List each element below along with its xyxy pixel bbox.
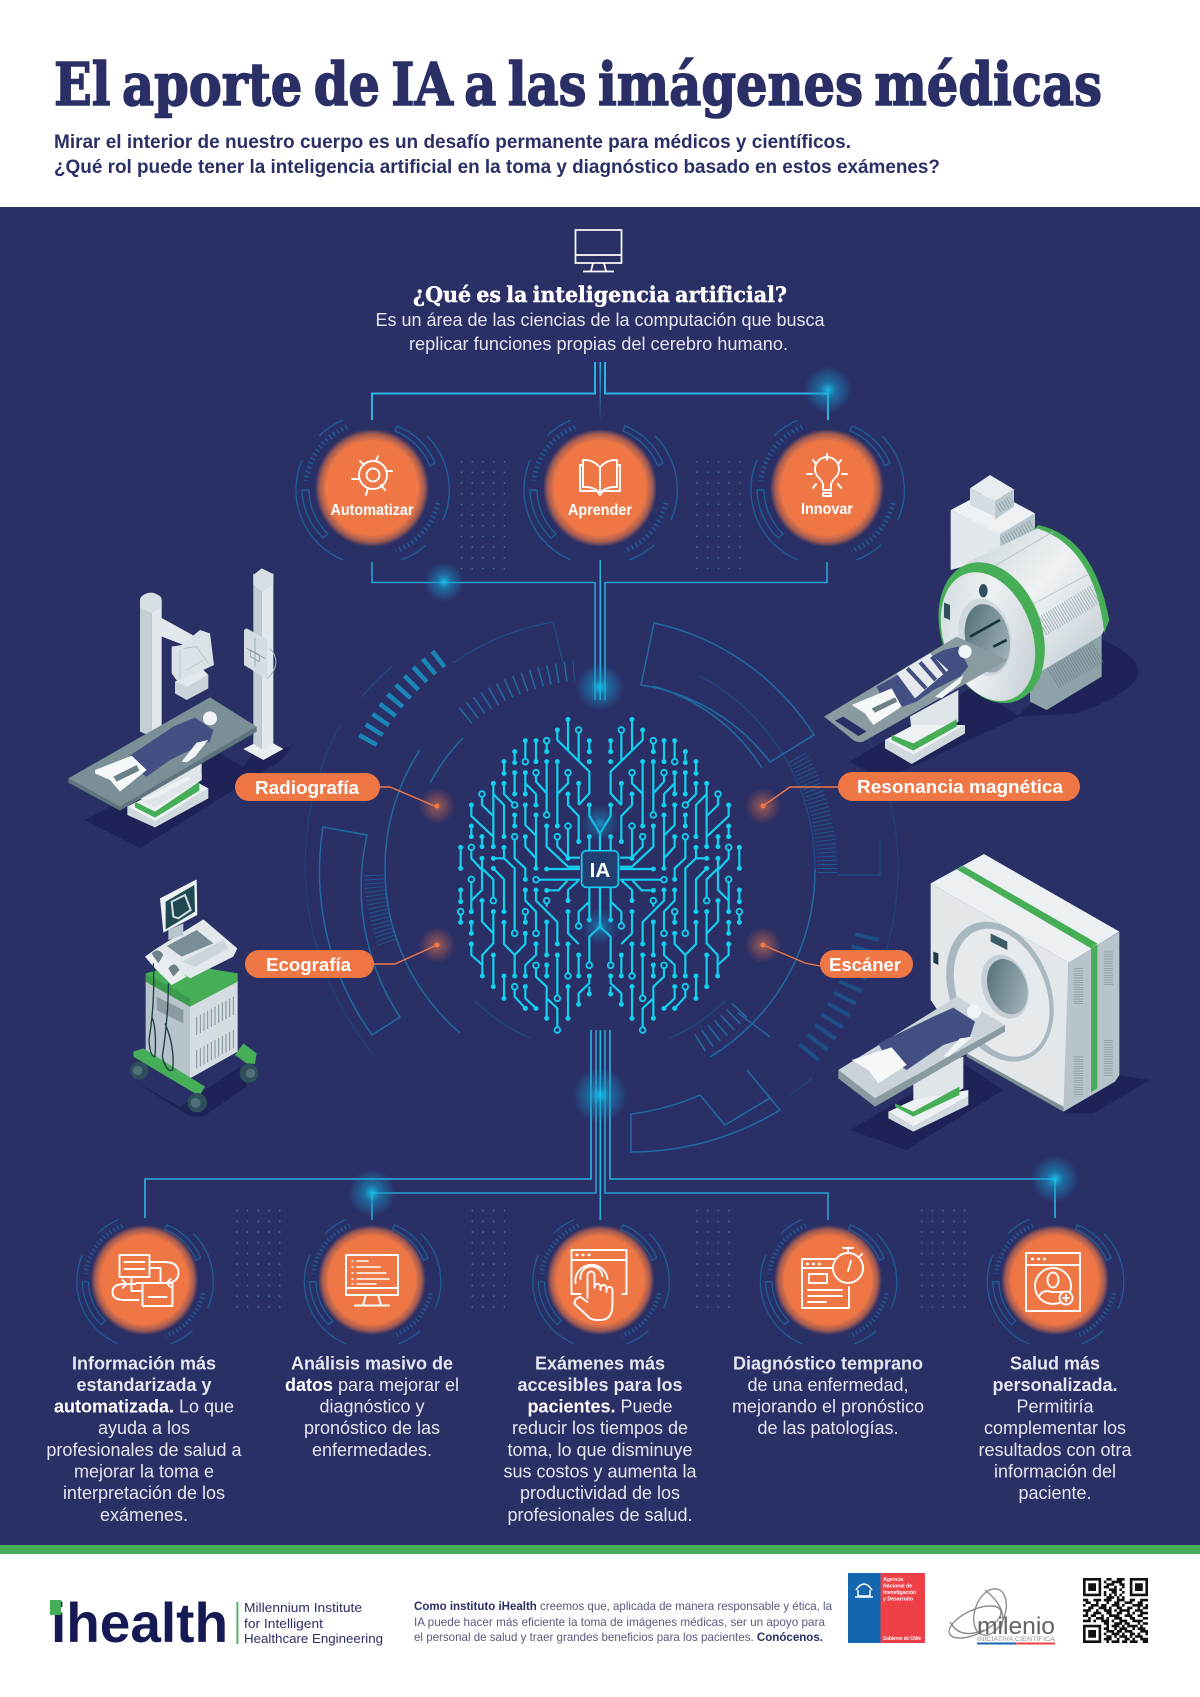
text: benefit 1: interpretación de los (63, 1483, 225, 1503)
machine: ultrasound (130, 879, 258, 1117)
benefit icon: touch access (533, 1219, 669, 1344)
icon: light bulb (807, 454, 847, 496)
badge: Automatizar (296, 420, 449, 560)
logo: Agencia Nacional: Nacional de (883, 1584, 912, 1590)
text: benefit 3: toma, lo que disminuye (507, 1440, 693, 1460)
label: Escáner (745, 927, 913, 978)
text: benefit 3: profesionales de salud. (507, 1505, 693, 1525)
text: benefit 2: diagnóstico y (319, 1396, 425, 1416)
logo: iHealth: for Intelligent (244, 1617, 324, 1631)
badge: Automatizar: Automatizar (330, 502, 414, 519)
patient (95, 711, 217, 792)
text: benefit 3 (503, 1354, 698, 1525)
text: benefit 5: Permitiría (1016, 1396, 1094, 1416)
label: Ecografía: Ecografía (266, 954, 352, 975)
text: institute statement: IA puede hacer más eficiente la toma de imágenes médicas, ser un apoyo para (414, 1615, 825, 1629)
logo: Agencia Nacional: Investigación (883, 1590, 916, 1596)
text: benefit 4: mejorando el pronóstico (732, 1396, 924, 1416)
text: AI definition: replicar funciones propias del cerebro humano. (409, 334, 788, 354)
central HUD rings (305, 622, 898, 1152)
brain circuit (458, 719, 742, 1033)
machine: MRI (824, 475, 1138, 780)
text: benefit 2: datos para mejorar el (285, 1375, 459, 1395)
label: Resonancia magnética: Resonancia magnética (857, 776, 1064, 797)
logo: Milenio: INICIATIVA CIENTÍFICA (977, 1634, 1055, 1643)
text: benefit 1: automatizada. Lo que (54, 1396, 234, 1416)
logo: Agencia Nacional: Gobierno de Chile (883, 1636, 921, 1642)
patient (852, 645, 972, 725)
text: benefit 3: sus costos y aumenta la (503, 1462, 698, 1482)
logo: iHealth: Millennium Institute (244, 1601, 362, 1615)
text: benefit 5: resultados con otra (978, 1440, 1133, 1460)
text: benefit 5: personalizada. (992, 1375, 1118, 1395)
text: benefit 5: información del (994, 1462, 1116, 1482)
connectors: top (371, 362, 852, 425)
text: benefit 1: mejorar la toma e (74, 1462, 214, 1482)
text: benefit 4 (732, 1354, 924, 1438)
text: benefit 2 (285, 1354, 459, 1460)
icon: book (580, 460, 620, 495)
heading: what is AI: ¿Qué es la inteligencia artificial? (413, 282, 787, 307)
patient (852, 1005, 981, 1083)
green footer stripe (0, 1545, 1200, 1554)
panel: dark main panel (0, 207, 1200, 1545)
logo: Agencia Nacional: y Desarrollo (883, 1596, 913, 1602)
text: benefit 5: Salud más (1010, 1354, 1100, 1374)
dot grids (235, 461, 966, 1317)
text: benefit 3: accesibles para los (517, 1375, 683, 1395)
badge: Aprender: Aprender (568, 502, 632, 519)
label: Resonancia magnética (745, 772, 1080, 824)
text: benefit 2: enfermedades. (312, 1440, 432, 1460)
machine: CT scanner (838, 854, 1150, 1150)
logo: iHealth: ihealth (51, 1591, 228, 1654)
text: benefit 3: reducir los tiempos de (512, 1418, 688, 1438)
text: benefit 5: complementar los (984, 1418, 1126, 1438)
connectors: middle (372, 560, 827, 711)
text: benefit 1: profesionales de salud a (46, 1440, 243, 1460)
chip IA (582, 851, 618, 887)
icon: gear (352, 456, 392, 495)
badge: Aprender (524, 420, 677, 560)
benefit icon: standardized information (77, 1219, 213, 1344)
QR code (1083, 1578, 1148, 1643)
label: Radiografía: Radiografía (255, 777, 360, 798)
benefit icon: early diagnosis stopwatch (760, 1219, 897, 1344)
logo: Agencia Nacional (848, 1573, 925, 1643)
text: AI definition (376, 310, 825, 354)
text: institute statement: Como instituto iHealth creemos que, aplicada de manera responsable y ética, la (414, 1599, 832, 1613)
text: benefit 3: productividad de los (520, 1483, 680, 1503)
logo: Milenio: milenio (977, 1613, 1055, 1640)
badge: Innovar: Innovar (801, 501, 853, 518)
text: benefit 1: exámenes. (100, 1505, 188, 1525)
text: benefit 2: Análisis masivo de (291, 1354, 453, 1374)
icon: computer monitor (576, 230, 622, 272)
text: AI definition: Es un área de las ciencias de la computación que busca (376, 310, 825, 330)
label: Radiografía (235, 773, 455, 824)
logo: iHealth: Healthcare Engineering (244, 1632, 383, 1646)
text: benefit 3: Exámenes más (535, 1354, 665, 1374)
thick ticks (367, 655, 444, 742)
text: benefit 3: pacientes. Puede (527, 1396, 673, 1416)
text: benefit 1: ayuda a los (98, 1418, 190, 1438)
text: benefit 4: de las patologías. (757, 1418, 899, 1438)
benefit icon: big data (304, 1219, 441, 1344)
text: benefit 5: paciente. (1018, 1483, 1092, 1503)
connectors: bottom (145, 1030, 1079, 1220)
machine: radiography (68, 568, 292, 848)
text: benefit 4: de una enfermedad, (747, 1375, 909, 1395)
subtitle (54, 132, 940, 178)
text: institute statement: el personal de salud y traer grandes beneficios para los pacientes. Conócenos. (414, 1630, 823, 1644)
label: Ecografía (245, 927, 455, 978)
subtitle: ¿Qué rol puede tener la inteligencia artificial en la toma y diagnóstico basado en estos exámenes? (54, 157, 940, 178)
text: benefit 1: Información más (72, 1354, 216, 1374)
logo: iHealth (50, 1591, 383, 1654)
benefit icon: personalized health (987, 1219, 1124, 1344)
text: benefit 4: Diagnóstico temprano (733, 1354, 923, 1374)
text: benefit 5 (978, 1354, 1133, 1503)
label: Escáner: Escáner (829, 954, 901, 975)
text: benefit 1 (46, 1354, 243, 1525)
badge: Innovar (751, 420, 904, 560)
sectors (641, 623, 814, 762)
logo: Agencia Nacional: Agencia (883, 1577, 903, 1583)
text: benefit 2: pronóstico de las (304, 1418, 440, 1438)
text: benefit 1: estandarizada y (76, 1375, 212, 1395)
chip IA: IA (590, 859, 610, 882)
logo: Milenio (945, 1584, 1055, 1645)
subtitle: Mirar el interior de nuestro cuerpo es un desafío permanente para médicos y científicos. (54, 132, 851, 153)
text: institute statement (414, 1599, 832, 1644)
